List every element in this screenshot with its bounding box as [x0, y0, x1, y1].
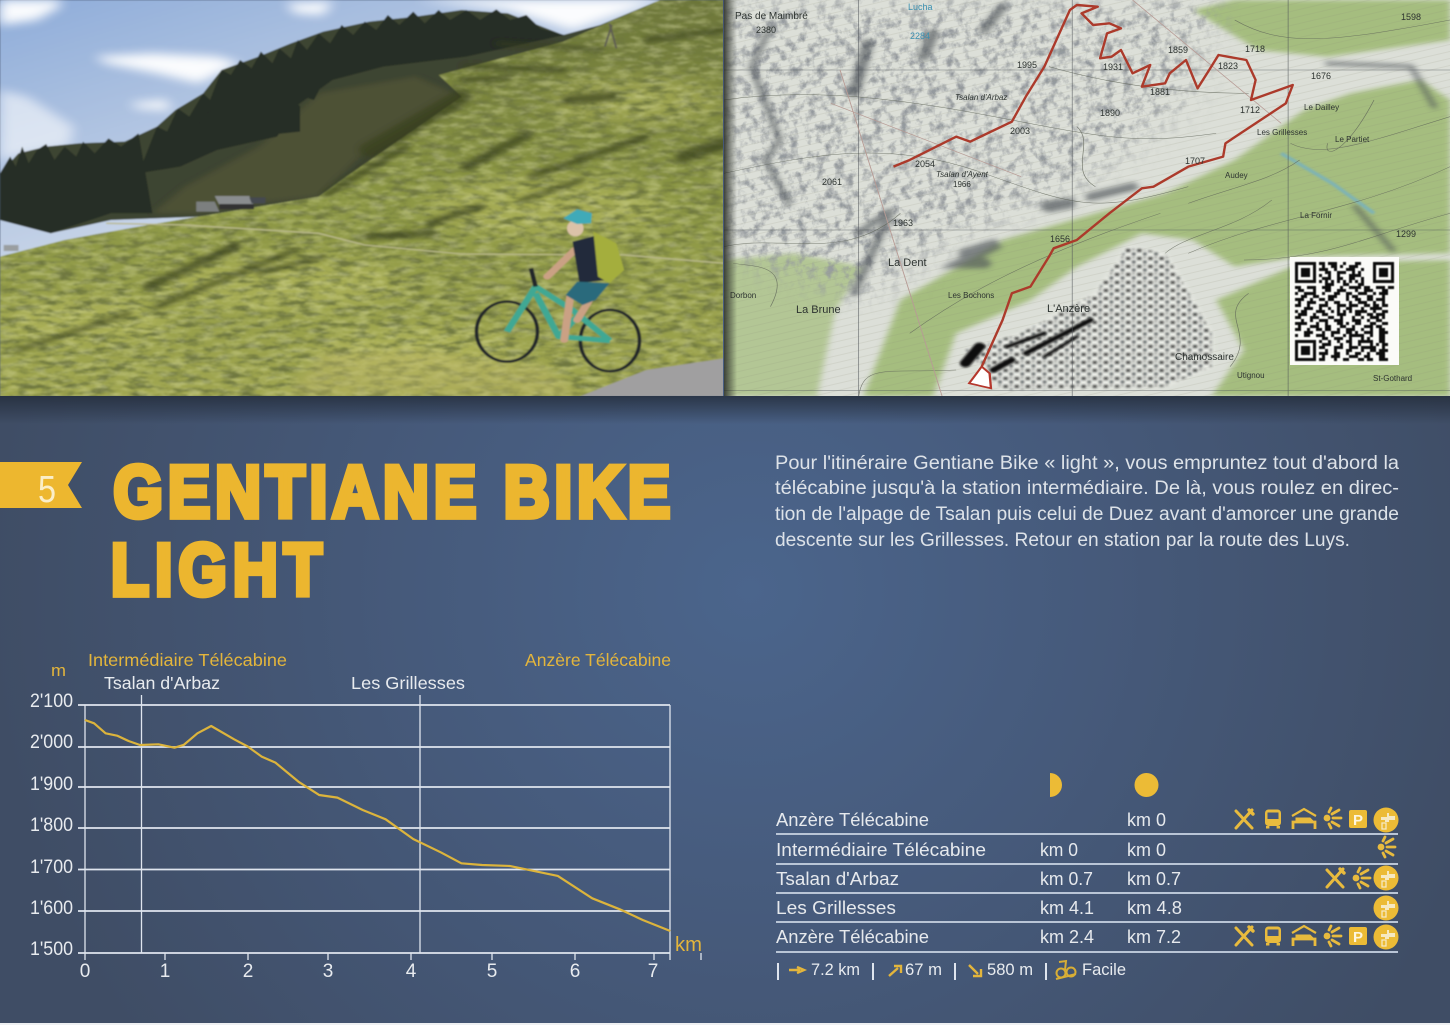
QR white background	[1290, 257, 1399, 365]
full day distances: km 0	[1127, 810, 1166, 830]
map place names: 1931	[1103, 62, 1123, 72]
map place names: 1881	[1150, 87, 1170, 97]
axis unit labels: m	[51, 661, 66, 680]
cliff hachures	[752, 7, 1434, 293]
y axis labels: 1'800	[30, 815, 73, 836]
full day distances: km 4.8	[1127, 898, 1182, 918]
contour texture	[724, 0, 1450, 397]
y axis labels: 1'500	[30, 939, 73, 960]
map place names: 1299	[1396, 229, 1416, 239]
bottom page edge	[0, 1023, 1450, 1025]
route line	[893, 5, 1293, 367]
grass ridges	[18, 30, 724, 350]
service icon row 4	[1374, 896, 1398, 920]
forest slope	[11, 3, 654, 234]
cable car line	[831, 0, 1281, 397]
full day distances: km 0.7	[1127, 869, 1181, 889]
x axis labels: 5	[487, 961, 497, 982]
grassy hillside	[0, 0, 724, 397]
stop names: Anzère Télécabine	[776, 810, 929, 830]
y axis labels: 2'000	[30, 732, 73, 753]
title: GENTIANE BIKE	[114, 452, 670, 533]
tree clusters	[0, 9, 564, 233]
map base	[724, 0, 1450, 396]
separators	[778, 963, 1046, 980]
cyclist with mountain bike	[476, 209, 639, 371]
backpack	[593, 232, 624, 283]
white stop labels: Les Grillesses	[351, 673, 465, 693]
map place names: 1707	[1185, 156, 1205, 166]
timetable	[776, 773, 1398, 952]
map fold shadow	[724, 0, 737, 396]
map place names: La Brune	[796, 304, 841, 316]
table lines	[776, 834, 1398, 952]
half day distances: km 0	[1040, 840, 1078, 860]
stop names: Les Grillesses	[776, 898, 896, 918]
ribbon shape	[0, 462, 82, 508]
full day distances: km 0	[1127, 840, 1166, 860]
shadow beneath photos	[0, 396, 1450, 424]
map place names: La Dent	[888, 257, 927, 269]
elevation line	[85, 720, 670, 931]
x axis labels: 1	[160, 961, 170, 982]
half day distances: km 4.1	[1040, 898, 1094, 918]
descent arrow	[969, 965, 981, 976]
stop names: Intermédiaire Télécabine	[776, 840, 986, 860]
x axis labels: 4	[406, 961, 417, 982]
Anzere village ground	[965, 247, 1212, 390]
map place names: 2003	[1010, 126, 1030, 136]
panel: topographic route map	[724, 0, 1450, 397]
full day icon	[1134, 773, 1158, 797]
rider legs and arms	[547, 250, 596, 340]
half day distances	[1040, 840, 1094, 947]
rider torso	[573, 235, 605, 283]
map place names: 1598	[1401, 12, 1421, 22]
map place names: Le Partiet	[1335, 135, 1370, 144]
map place names: 1676	[1311, 71, 1331, 81]
stop names	[776, 810, 986, 947]
map grid lines	[724, 0, 1450, 397]
map place names: 1966	[953, 180, 971, 189]
full day distances: km 7.2	[1127, 927, 1181, 947]
map place names: St-Gothard	[1373, 374, 1412, 383]
description text: tion de l'alpage de Tsalan puis celui de Duez avant d'amorcer une grande	[775, 504, 1399, 525]
map place names: Dorbon	[730, 291, 756, 300]
contour lines	[724, 20, 1450, 397]
map place names: 1823	[1218, 61, 1238, 71]
head and helmet	[567, 220, 584, 236]
description text	[775, 453, 1399, 551]
half day distances: km 0.7	[1040, 869, 1093, 889]
shorts	[566, 282, 609, 305]
green pasture areas	[724, 0, 1450, 397]
route number: 5	[38, 469, 56, 511]
map place names: 2061	[822, 177, 842, 187]
map place names: 1712	[1240, 105, 1260, 115]
service icons row 5: P	[1353, 929, 1363, 946]
grass dark texture	[0, 62, 723, 396]
map place names: 1963	[893, 218, 913, 228]
summary values: 580 m	[987, 960, 1033, 979]
sky	[0, 0, 660, 390]
map place names: Chamossaire	[1175, 352, 1234, 363]
gravel path	[579, 358, 724, 397]
x axis labels: 2	[243, 961, 253, 982]
x axis labels: 0	[80, 961, 90, 982]
chart gridlines	[78, 695, 701, 960]
village dark buildings	[965, 320, 1091, 370]
x axis labels	[80, 961, 658, 982]
service icons row 3	[1327, 866, 1398, 890]
yellow stop labels: Intermédiaire Télécabine	[88, 650, 287, 670]
map place names: 1890	[1100, 108, 1120, 118]
map place names: 1656	[1050, 234, 1070, 244]
summary values: Facile	[1082, 960, 1126, 979]
handlebar	[531, 268, 536, 287]
map place names: 2054	[915, 159, 935, 169]
stop names: Tsalan d'Arbaz	[776, 869, 899, 889]
y axis labels: 1'600	[30, 898, 73, 919]
distance arrow	[789, 967, 804, 973]
grass bright texture	[0, 0, 724, 397]
service icons row 1	[1236, 808, 1398, 832]
service icons row 1: P	[1353, 812, 1363, 829]
QR modules	[1295, 262, 1394, 361]
axis unit labels	[51, 661, 702, 956]
service icons row 5	[1236, 924, 1398, 950]
map place names: 2284	[910, 31, 930, 41]
elevation profile chart	[30, 650, 702, 982]
x axis labels: 6	[570, 961, 580, 982]
yellow stop labels	[88, 650, 671, 670]
map place names: L'Anzère	[1047, 303, 1090, 315]
rock texture	[724, 0, 1216, 300]
map place names: Les Bochons	[948, 291, 994, 300]
ascent arrow	[889, 966, 901, 976]
summary values: 7.2 km	[811, 960, 860, 979]
axis unit labels: km	[675, 934, 702, 956]
map place names: Utignou	[1237, 371, 1265, 380]
stop names: Anzère Télécabine	[776, 927, 929, 947]
map place names: 1859	[1168, 45, 1188, 55]
bright foreground flowers	[286, 350, 582, 397]
y axis labels: 1'700	[30, 857, 73, 878]
QR code	[1290, 257, 1399, 365]
map place names: Pas de Maimbré	[735, 11, 808, 22]
Anzere village	[965, 247, 1212, 390]
white stop labels	[104, 673, 465, 693]
difficulty biker icon	[1056, 961, 1076, 979]
description text: descente sur les Grillesses. Retour en station par la route des Luys.	[775, 530, 1350, 551]
summary values: 67 m	[905, 960, 942, 979]
panel: landscape photograph	[0, 0, 725, 397]
map place names: 2380	[756, 25, 776, 35]
x axis labels: 3	[323, 961, 333, 982]
bike frame	[507, 287, 610, 341]
map place names: Lucha	[908, 2, 933, 12]
map place names: Le Dailley	[1304, 103, 1339, 112]
half day icon	[1050, 773, 1062, 797]
map place names: Audey	[1225, 171, 1248, 180]
full day distances	[1127, 810, 1182, 947]
sun-lit grass patches	[0, 77, 725, 373]
clouds	[0, 0, 660, 160]
yellow stop labels: Anzère Télécabine	[525, 650, 671, 670]
description text: Pour l'itinéraire Gentiane Bike « light », vous empruntez tout d'abord la	[775, 453, 1399, 474]
y axis labels	[30, 691, 73, 960]
x axis labels: 7	[648, 961, 658, 982]
map place names: 1995	[1017, 60, 1037, 70]
summary values	[811, 960, 1126, 979]
y axis labels: 1'900	[30, 774, 73, 795]
stream	[1281, 153, 1374, 213]
map place names: Tsalan d'Ayent	[936, 170, 989, 179]
service icon row 2	[1378, 837, 1395, 857]
map place names: 1718	[1245, 44, 1265, 54]
white stop labels: Tsalan d'Arbaz	[104, 673, 220, 693]
map place names	[730, 2, 1421, 383]
title: LIGHT	[111, 530, 322, 611]
hiking trail	[106, 223, 724, 263]
start marker	[969, 367, 991, 388]
map place names: Tsalan d'Arbaz	[955, 93, 1007, 102]
route summary	[778, 960, 1126, 980]
map place names: La Fornir	[1300, 211, 1332, 220]
y axis labels: 2'100	[30, 691, 73, 712]
map place names: Les Grillesses	[1257, 128, 1307, 137]
description text: télécabine jusqu'à la station intermédiaire. De là, vous roulez en direc-	[775, 478, 1399, 499]
bike wheels	[476, 302, 639, 371]
half day distances: km 2.4	[1040, 927, 1094, 947]
alpine huts	[4, 23, 616, 251]
title	[111, 452, 670, 611]
brown mid slope	[152, 77, 462, 213]
route number ribbon	[0, 462, 82, 511]
